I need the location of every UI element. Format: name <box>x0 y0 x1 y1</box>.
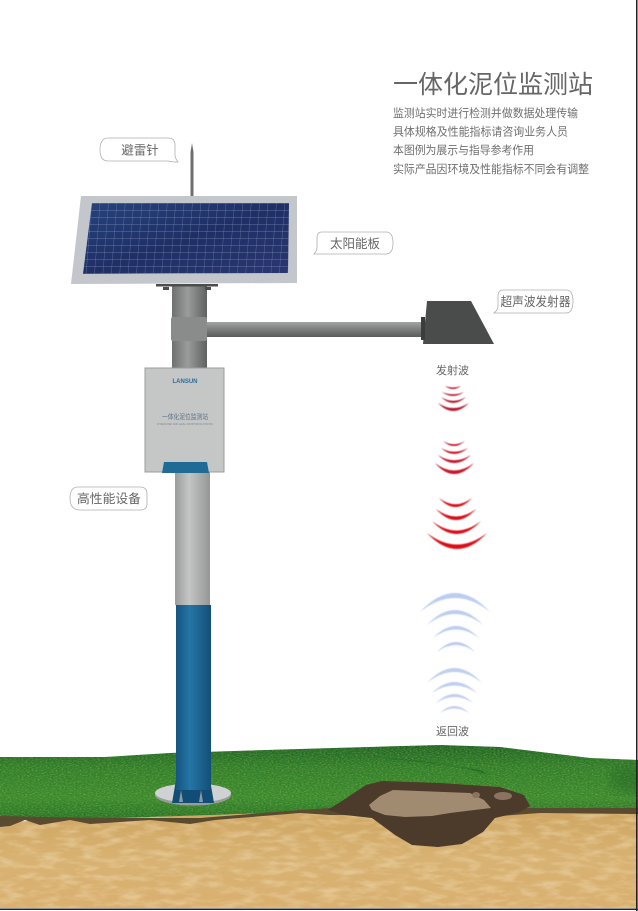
callout: solar panel: 太阳能板 <box>330 236 380 251</box>
box sublabel: INTEGRATED MUD LEVEL MONITORING STATION <box>157 422 213 426</box>
pebbles <box>472 792 512 800</box>
label: returned wave: 返回波 <box>436 725 469 738</box>
cell grid <box>83 203 289 274</box>
description text <box>393 106 589 176</box>
dark earth strip between grass and soil <box>0 808 638 827</box>
label: emitted wave: 发射波 <box>436 363 469 377</box>
emitted waves small group <box>438 386 469 411</box>
emitted waves medium group <box>435 441 474 474</box>
middle grey pole section <box>175 470 210 605</box>
solar panel <box>71 196 297 284</box>
callout: ultrasonic transmitter <box>494 290 573 313</box>
lower blue pole section <box>176 605 211 790</box>
returned waves lower group <box>427 668 482 713</box>
callout: lightning rod <box>100 138 178 162</box>
title: 一体化泥位监测站 <box>393 71 593 99</box>
mount bracket <box>156 284 218 290</box>
horizontal arm <box>207 322 423 337</box>
box logo: LANSUN <box>172 379 198 385</box>
description text: 具体规格及性能指标请咨询业务人员 <box>393 124 568 138</box>
upper pole section <box>172 285 207 370</box>
description text: 监测站实时进行检测并做数据处理传输 <box>393 106 578 120</box>
panel cells <box>83 203 289 274</box>
pole collar <box>171 317 207 341</box>
mud pit <box>328 781 530 847</box>
returned waves upper group <box>420 593 490 652</box>
callout: solar panel <box>314 232 393 254</box>
callout: ultrasonic transmitter: 超声波发射器 <box>500 294 571 309</box>
callout: lightning rod: 避雷针 <box>121 142 159 158</box>
sand soil cross-section <box>0 810 638 908</box>
description text: 实际产品因环境及性能指标不同会有调整 <box>393 162 589 176</box>
equipment box <box>145 368 224 473</box>
box label: 一体化泥位监测站 <box>162 412 208 421</box>
grass field <box>0 745 638 820</box>
monitoring pole <box>155 143 423 806</box>
dark mud body <box>328 781 530 847</box>
base plate <box>155 780 231 806</box>
mud surface <box>369 790 491 817</box>
emitted waves large group <box>427 498 487 549</box>
lightning rod <box>190 143 194 196</box>
box blue flap <box>162 462 209 473</box>
callout: high performance equipment: 高性能设备 <box>77 491 141 506</box>
description text: 本图例为展示与指导参考作用 <box>393 143 534 157</box>
panel frame <box>71 196 297 284</box>
callout: high performance equipment <box>70 487 147 510</box>
ultrasonic sensor <box>421 301 494 344</box>
